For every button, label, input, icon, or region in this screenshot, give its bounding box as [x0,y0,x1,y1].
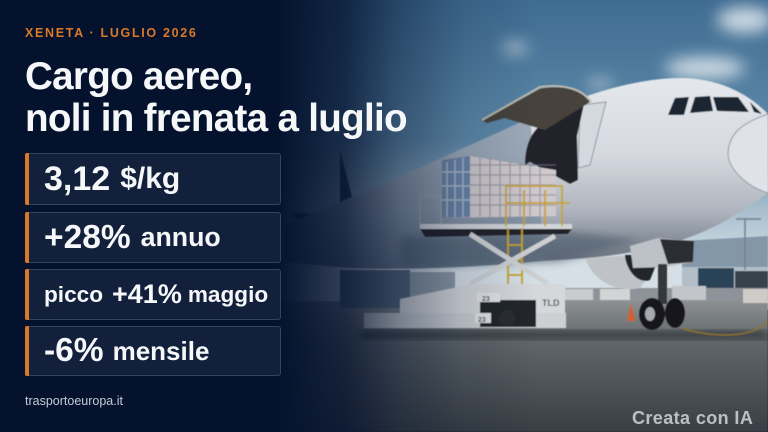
engine [585,255,660,289]
lift truck base: 23 [482,296,490,303]
card accent bar [25,153,29,205]
card: May peak [25,269,281,320]
title: noli in frenata a luglio [25,97,407,140]
card text: peak [44,279,268,309]
kicker: source and date: XENETA · LUGLIO 2026 [25,26,198,40]
card accent bar [25,326,29,376]
wing [290,212,415,255]
card text: price [44,160,180,198]
card text: price: 3,12 [44,160,110,198]
card text: peak: picco [44,282,103,306]
hose [682,321,768,335]
cargo pallet [442,156,556,218]
card text: peak: +41% [112,279,182,309]
title [25,55,407,140]
fuselage rear shading [285,118,545,269]
cargo door opening [525,104,584,184]
background cargo row [340,270,768,308]
fuselage [285,78,768,269]
sky [0,0,768,310]
radome [728,114,768,193]
open cargo door [482,87,590,130]
door frame panel [578,102,606,168]
belly shadow [400,232,640,268]
card: annual change [25,212,281,263]
lift truck base: 23 [478,317,486,324]
lift truck base: TLD [542,298,560,308]
clouds [502,7,768,88]
title: Cargo aereo, [25,55,252,98]
card text: annual [44,218,221,256]
lift platform [420,196,572,237]
card text: annual: annuo [141,222,221,252]
card text: annual: +28% [44,218,131,256]
card text: peak: maggio [188,282,268,306]
source website: trasportoeuropa.it [25,394,123,408]
card accent bar [25,212,29,263]
card accent bar [25,269,29,320]
card text: price: $/kg [120,162,180,195]
ground [0,301,768,432]
terminal building [682,218,768,291]
landing gear [630,238,694,330]
card: monthly change [25,326,281,376]
tail fin [340,150,354,205]
yellow railing [506,186,570,300]
scissor lift [470,234,555,284]
card text: monthly: mensile [113,336,209,366]
card text: monthly [44,332,209,369]
lift truck base [364,284,566,328]
traffic cone [627,303,635,321]
card text: monthly: -6% [44,332,104,369]
watermark: Creata con IA [632,408,753,428]
card: price per kg [25,153,281,205]
cockpit windows [668,96,762,115]
